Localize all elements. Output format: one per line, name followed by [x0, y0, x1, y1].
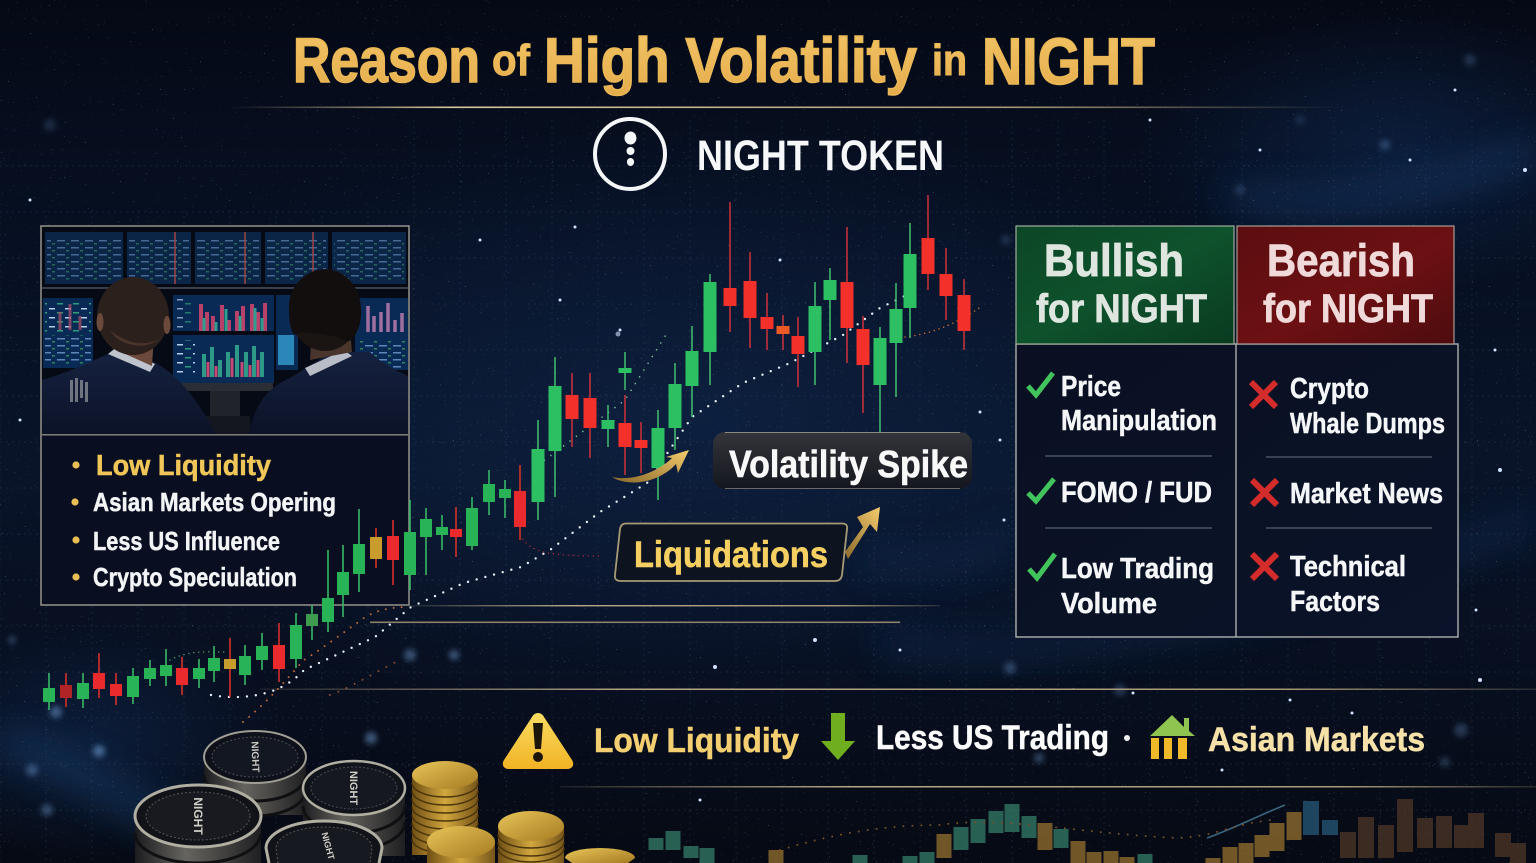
black coin stack rear — [204, 731, 306, 816]
label: less us trading: Less US Trading — [876, 719, 1109, 757]
label: low liquidity: Low Liquidity — [594, 722, 799, 760]
lower candles — [49, 465, 520, 710]
icon: warning triangle — [503, 713, 573, 769]
separator dot — [1124, 735, 1130, 741]
causes list — [71, 450, 336, 592]
black coin front centre — [266, 821, 382, 863]
black coin stack right — [303, 761, 405, 856]
column: bearish — [1236, 226, 1454, 637]
footer reasons bar — [503, 713, 1425, 769]
header: bearish: for NIGHT — [1263, 287, 1433, 331]
photo: traders watching monitors — [42, 227, 408, 434]
token name: NIGHT TOKEN — [697, 132, 944, 180]
upper candles — [538, 195, 964, 520]
title: NIGHT — [982, 24, 1155, 98]
list: bullish reasons — [1028, 371, 1217, 620]
icon: asian market building — [1150, 715, 1195, 759]
callout: volatility spike — [713, 432, 972, 489]
list: bearish reasons: Technical — [1290, 551, 1406, 583]
title — [293, 24, 1155, 98]
gold coin stacks front — [427, 811, 635, 863]
list: bullish reasons: FOMO / FUD — [1061, 477, 1212, 509]
label: asian markets: Asian Markets — [1208, 721, 1425, 759]
black coin stack rear: NIGHT — [248, 741, 261, 773]
list: bullish reasons: Low Trading — [1061, 553, 1214, 585]
black coin stack front left — [135, 785, 261, 863]
list: bearish reasons: Factors — [1290, 586, 1380, 618]
callout: volatility spike: Volatility Spike — [729, 444, 968, 486]
list: bearish reasons: Whale Dumps — [1290, 408, 1445, 440]
trader right — [249, 269, 408, 434]
black coin stack right: NIGHT — [347, 771, 359, 805]
title: Reason — [293, 26, 480, 96]
title: in — [932, 36, 967, 85]
panel: bullish and bearish table — [1016, 226, 1458, 637]
rule lines — [260, 605, 1536, 788]
icon: green down arrow — [821, 713, 855, 760]
callout: liquidations — [615, 507, 880, 581]
callout: liquidations: Liquidations — [634, 534, 828, 575]
header: bullish: Bullish — [1044, 235, 1184, 286]
black coin front centre: NIGHT — [320, 831, 337, 861]
list: bearish reasons: Market News — [1290, 478, 1443, 510]
causes list: Less US Influence — [93, 526, 280, 556]
list: bullish reasons: Price — [1061, 371, 1121, 403]
header: bearish: Bearish — [1267, 235, 1415, 286]
icon: night token — [595, 119, 665, 189]
trend dots — [170, 290, 982, 722]
arrow: up from liquidations — [845, 507, 880, 559]
arrow: swoosh to volatility spike — [612, 450, 689, 483]
gold coin stack rear — [412, 761, 478, 855]
header: bullish — [1016, 226, 1234, 344]
header: bearish — [1237, 226, 1454, 344]
column: bullish — [1016, 226, 1234, 620]
title: of — [492, 36, 530, 85]
trader left — [42, 277, 216, 434]
header: bullish: for NIGHT — [1036, 287, 1207, 331]
list: bullish reasons: Volume — [1061, 588, 1157, 620]
coins — [135, 731, 635, 863]
causes list: Crypto Speciulation — [93, 562, 297, 592]
token badge — [595, 119, 944, 189]
causes list: Asian Markets Opering — [93, 487, 336, 517]
list: bullish reasons: Manipulation — [1061, 405, 1217, 437]
list: bearish reasons — [1236, 344, 1445, 637]
black coin stack front left: NIGHT — [191, 797, 205, 835]
faint bottom chart — [656, 799, 1518, 863]
panel: traders and causes — [41, 226, 409, 605]
title: High Volatility — [544, 26, 917, 96]
causes list: Low Liquidity — [96, 450, 271, 482]
candlestick chart — [49, 195, 982, 722]
list: bearish reasons: Crypto — [1290, 373, 1369, 405]
